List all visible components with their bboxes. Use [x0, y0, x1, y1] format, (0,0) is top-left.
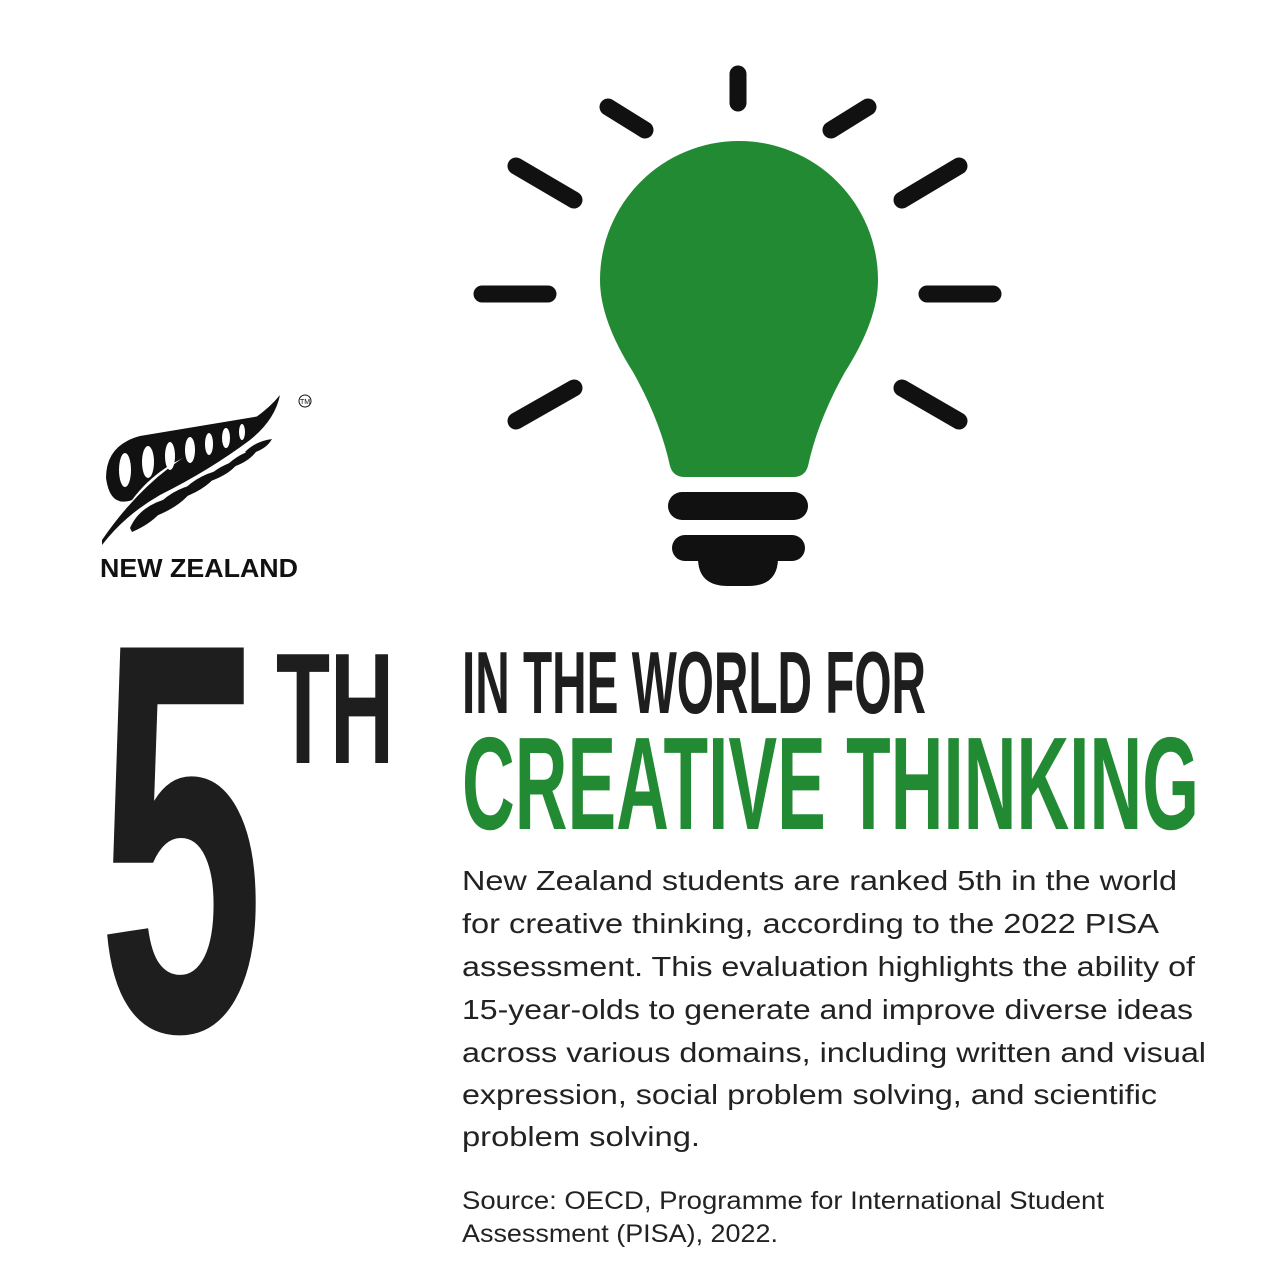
fern frond: [102, 395, 280, 545]
body text: problem solving.: [462, 1121, 700, 1152]
big rank: 5th: TH: [276, 621, 394, 797]
body text: expression, social problem solving, and scientific: [462, 1079, 1157, 1110]
fern highlights: [119, 424, 245, 487]
bulb base: [668, 492, 808, 520]
body text: [462, 865, 1206, 1152]
logo wordmark: NEW ZEALAND: [100, 553, 298, 583]
body text: across various domains, including written and visual: [462, 1037, 1206, 1068]
logo: New Zealand fern: [100, 395, 311, 583]
source note: [462, 1187, 1104, 1248]
icon: light bulb: [482, 74, 993, 586]
source note: Source: OECD, Programme for International Student: [462, 1187, 1104, 1215]
body text: New Zealand students are ranked 5th in the world: [462, 865, 1177, 896]
big rank: 5th: 5: [98, 527, 264, 1148]
bulb rays: [482, 74, 993, 421]
body text: for creative thinking, according to the 2022 PISA: [462, 908, 1159, 939]
body text: assessment. This evaluation highlights the ability of: [462, 951, 1195, 982]
body text: 15-year-olds to generate and improve diverse ideas: [462, 994, 1193, 1025]
trademark: TM: [300, 399, 310, 406]
source note: Assessment (PISA), 2022.: [462, 1220, 778, 1248]
bulb glass: [600, 141, 878, 477]
heading: [462, 633, 1199, 857]
